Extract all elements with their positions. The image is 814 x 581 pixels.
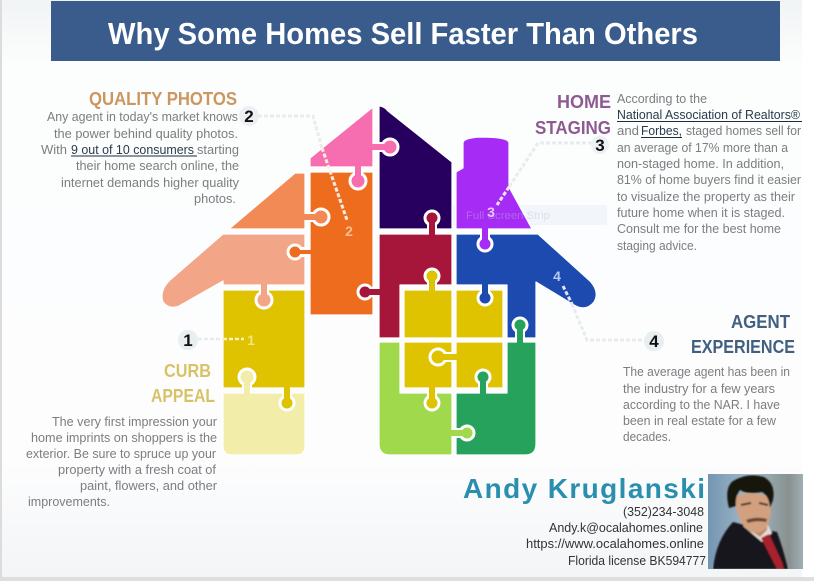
text: quality photos body: their home search online, the: [76, 158, 239, 173]
knob: maroon into orange: [358, 285, 381, 299]
piece: light orange roof: [229, 173, 305, 229]
heading: home staging: HOME: [557, 92, 611, 112]
badge 4: 4: [649, 332, 659, 351]
piece: light green: [379, 342, 452, 455]
connector 4: [563, 286, 644, 340]
knob: green into yellow: [476, 370, 490, 395]
text: home staging body: an average of 17% more than a: [617, 140, 789, 155]
text: quality photos body: Any agent in today's market knows: [47, 109, 238, 124]
connector 3: [497, 143, 592, 205]
piece: centre yellow bottom left: [404, 342, 452, 388]
text: home staging body: and: [617, 123, 639, 138]
knob: yellow into maroon: [425, 269, 439, 292]
text: home staging body: National Association of Realtors®: [617, 107, 800, 122]
badge 3: [591, 136, 609, 155]
heading: curb appeal: [151, 361, 215, 406]
text: home staging body: staged homes sell for: [686, 123, 802, 138]
shirt: [743, 525, 772, 542]
house number 1: 1: [247, 332, 255, 348]
badge 3: 3: [595, 136, 605, 155]
knob: pale into yellow: [239, 369, 255, 395]
title banner: Why Some Homes Sell Faster Than Others: [108, 16, 698, 51]
piece: centre yellow bottom right: [456, 342, 503, 388]
text: home staging body: Consult me for the best home: [617, 221, 781, 236]
house number 3: 3: [487, 204, 495, 220]
text: home staging body: to visualize the property as their: [617, 189, 796, 204]
knob: light orange into orange: [303, 209, 329, 225]
contact details: https://www.ocalahomes.online: [526, 536, 704, 551]
text: quality photos body: [41, 109, 239, 206]
heading: home staging: [535, 92, 611, 138]
badge 2: 2: [244, 107, 254, 126]
knob: pink into navy: [371, 139, 398, 155]
title banner: [51, 1, 780, 61]
text: home staging body: non-staged home. In addition,: [617, 156, 784, 171]
text: agent experience body: decades.: [623, 429, 671, 444]
text: home staging body: staging advice.: [617, 238, 697, 253]
knob: yellow into light green: [425, 386, 439, 410]
text: curb appeal body: exterior. Be sure to spruce up your: [26, 446, 217, 461]
tie: [761, 534, 784, 569]
text: quality photos body: internet demands higher quality: [61, 175, 239, 190]
ghost strip behind house: [433, 205, 607, 225]
piece: dark green: [456, 342, 536, 455]
text: home staging body: Forbes,: [641, 123, 682, 138]
knob: light green into green: [450, 426, 474, 440]
piece: orange wall: [310, 172, 373, 315]
knob: yellow centre: [430, 349, 458, 365]
house number 4: 4: [553, 268, 561, 284]
text: agent experience body: The average agent has been in: [623, 364, 790, 379]
portrait photo: [708, 474, 803, 569]
suit: [713, 522, 788, 569]
knob: orange into salmon: [288, 245, 312, 259]
contact name: Andy Kruglanski: [463, 473, 705, 504]
piece: pink roof: [310, 107, 373, 167]
heading: curb appeal: APPEAL: [151, 386, 215, 406]
hair: [727, 475, 774, 508]
knob: yellow into pale: [280, 386, 294, 410]
piece: yellow wall: [223, 290, 305, 388]
heading: quality photos: QUALITY PHOTOS: [89, 89, 237, 109]
text: curb appeal body: home imprints on shoppers is the: [31, 430, 217, 445]
text: agent experience body: according to the NAR. I have: [623, 397, 780, 412]
heading: agent experience: AGENT: [731, 312, 790, 332]
text: quality photos body: starting: [197, 142, 239, 157]
knob: green into blue: [513, 318, 527, 344]
text: curb appeal body: The very first impression your: [52, 414, 218, 429]
heading: curb appeal: CURB: [164, 361, 211, 381]
badge 1: [178, 330, 198, 350]
piece: salmon roof arm: [162, 234, 305, 307]
piece: maroon: [379, 234, 452, 338]
text: quality photos body: 9 out of 10 consumers: [71, 142, 194, 157]
badge 2: [239, 106, 259, 126]
neck: [741, 514, 768, 537]
piece: centre yellow top left: [404, 290, 452, 338]
piece: purple chimney: [456, 137, 532, 229]
connector 1: [198, 338, 244, 340]
contact details: Andy.k@ocalahomes.online: [549, 520, 703, 535]
text: agent experience body: [623, 364, 790, 444]
text: home staging body: According to the: [617, 91, 707, 106]
badge 1: 1: [183, 331, 193, 350]
text: home staging body: 81% of home buyers find it easier: [617, 172, 802, 187]
text: agent experience body: been in real estate for a few: [623, 413, 777, 428]
text: agent experience body: the industry for a few years: [623, 381, 775, 396]
text: curb appeal body: improvements.: [28, 494, 110, 509]
face: [736, 493, 771, 533]
piece: pale yellow base: [223, 393, 305, 455]
eyes: [741, 503, 768, 505]
text: quality photos body: With: [41, 142, 67, 157]
ghost strip label: Full Screen Strip: [466, 210, 550, 222]
moustache: [746, 518, 767, 523]
contact details: (352)234-3048: [623, 504, 704, 519]
knob: blue into yellow: [478, 283, 492, 305]
heading: home staging: STAGING: [535, 118, 611, 138]
text: quality photos body: photos.: [194, 191, 236, 206]
contact details: [526, 504, 706, 568]
heading: agent experience: EXPERIENCE: [691, 337, 795, 357]
text: quality photos body: the power behind quality photos.: [54, 126, 238, 141]
text: curb appeal body: [26, 414, 218, 509]
piece: blue arm: [456, 234, 596, 338]
knob: salmon into yellow: [256, 283, 272, 308]
connector 2: [258, 116, 347, 220]
knob: purple into blue: [478, 227, 492, 251]
text: curb appeal body: paint, flowers, and other: [80, 478, 218, 493]
house puzzle: [162, 106, 596, 455]
text: home staging body: [617, 91, 802, 253]
text: curb appeal body: property with a fresh coat of: [58, 462, 216, 477]
piece: navy roof: [379, 106, 452, 229]
house number 2: 2: [345, 223, 353, 239]
knob: maroon into navy: [425, 211, 439, 236]
piece: centre yellow top right: [456, 290, 503, 338]
contact details: Florida license BK594777: [568, 553, 706, 568]
knob: pink into orange: [350, 165, 366, 189]
text: home staging body: future home when it is staged.: [617, 205, 785, 220]
heading: agent experience: [691, 312, 795, 357]
badge 4: [644, 331, 664, 351]
